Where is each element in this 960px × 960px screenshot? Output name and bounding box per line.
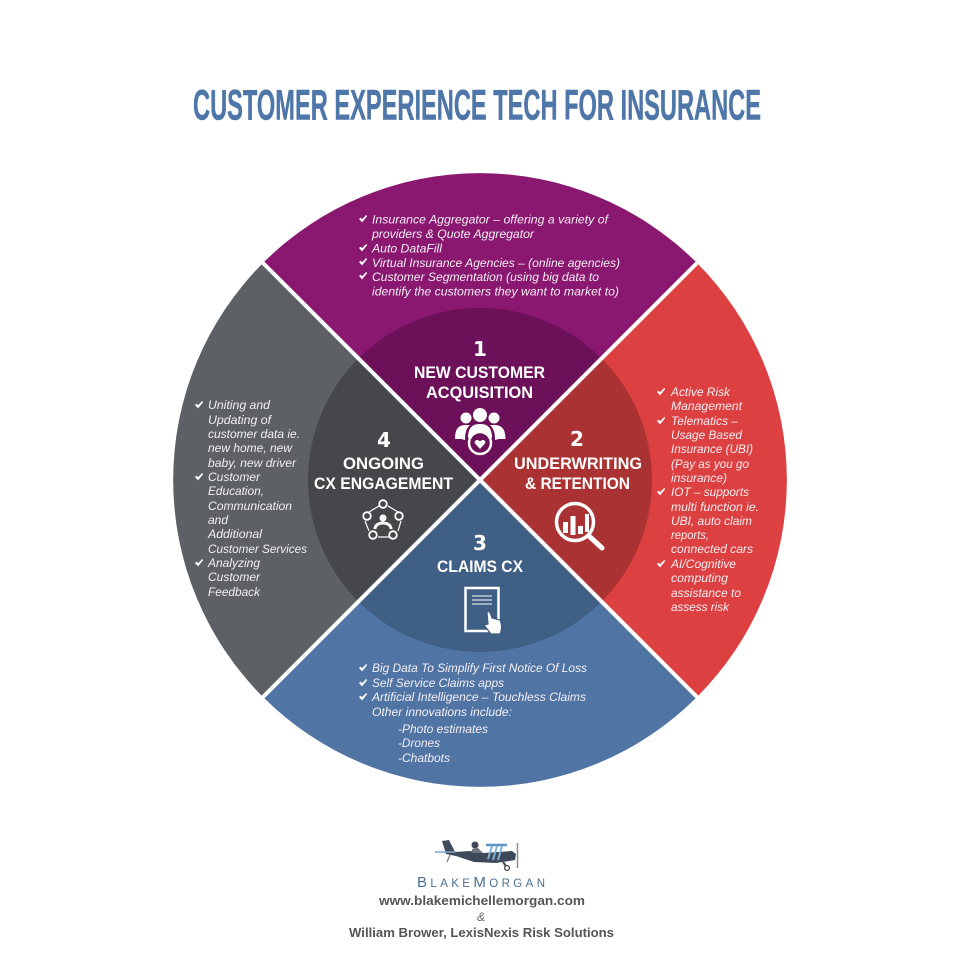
text block: section 2 list: IOT – supports xyxy=(671,487,749,499)
text block: section 1 list: Insurance Aggregator – offering a variety of xyxy=(372,214,610,226)
footer xyxy=(349,840,614,940)
icon: tablet with pointing hand xyxy=(466,588,502,634)
text block: section 2 list: (Pay as you go xyxy=(671,459,750,471)
text block: section 4 list: and xyxy=(208,515,229,527)
heading: section 2: 2 xyxy=(570,427,584,451)
heading: section 2 xyxy=(514,427,642,493)
text block: section 2 list: Telematics – xyxy=(671,416,739,428)
credit: William Brower, LexisNexis Risk Solutions xyxy=(349,925,614,940)
text block: section 4 list: Communication xyxy=(208,501,292,513)
icon: magnifier with bar chart xyxy=(556,504,602,548)
text block: section 3 list: -Drones xyxy=(398,738,440,750)
text block: section 3 list: Other innovations include: xyxy=(372,707,512,719)
text block: section 4 list: new home, new xyxy=(208,443,293,455)
text block: section 1 list: providers & Quote Aggregator xyxy=(371,229,535,241)
text block: section 2 list: Usage Based xyxy=(671,430,743,442)
website: www.blakemichellemorgan.com xyxy=(378,893,585,908)
text block: section 1 list xyxy=(359,214,620,298)
text block: section 2 list: reports, xyxy=(671,530,709,542)
text block: section 2 list: connected cars xyxy=(671,544,753,556)
text block: section 2 list xyxy=(657,387,759,614)
text block: section 4 list: Updating of xyxy=(208,415,273,427)
text block: section 3 list: Self Service Claims apps xyxy=(372,678,504,690)
text block: section 2 list: Insurance (UBI) xyxy=(671,444,753,456)
text block: section 4 list xyxy=(195,400,307,599)
heading: section 4: CX ENGAGEMENT xyxy=(314,474,454,493)
text block: section 2 list: UBI, auto claim xyxy=(671,516,752,528)
text block: section 4 list: baby, new driver xyxy=(208,458,297,470)
text block: section 3 list: Artificial Intelligence – Touchless Claims xyxy=(371,692,586,704)
ampersand: & xyxy=(477,910,485,924)
text block: section 4 list: Customer xyxy=(208,472,261,484)
heading: section 4: 4 xyxy=(377,428,391,452)
panel: ongoing cx engagement xyxy=(173,263,480,697)
text block: section 3 list xyxy=(359,663,587,765)
text block: section 4 list: Education, xyxy=(208,486,264,498)
text block: section 2 list: computing xyxy=(671,573,729,585)
heading: section 3 xyxy=(437,531,524,576)
text block: section 2 list: multi function ie. xyxy=(671,502,759,514)
text block: section 1 list: Auto DataFill xyxy=(371,244,442,256)
heading: section 1: ACQUISITION xyxy=(426,383,533,402)
panel: claims cx xyxy=(263,480,697,787)
text block: section 2 list: AI/Cognitive xyxy=(670,559,736,571)
panel: new customer acquisition xyxy=(263,173,697,480)
heading: section 2: & RETENTION xyxy=(525,474,630,493)
heading: section 1 xyxy=(414,337,545,402)
text block: section 4 list: Additional xyxy=(207,529,262,541)
logo wordmark: B LAKEM ORGAN xyxy=(417,874,545,891)
text block: section 1 list: identify the customers they want to market to) xyxy=(372,286,619,298)
heading: section 4: ONGOING xyxy=(343,454,424,473)
text block: section 2 list: Active Risk xyxy=(670,387,731,399)
text block: section 4 list: Uniting and xyxy=(208,400,271,412)
text block: section 1 list: Customer Segmentation (using big data to xyxy=(372,272,600,284)
text block: section 2 list: Management xyxy=(671,401,743,413)
text block: section 4 list: Analyzing xyxy=(207,558,261,570)
text block: section 3 list: -Chatbots xyxy=(398,753,450,765)
heading: section 2: UNDERWRITING xyxy=(514,454,642,473)
text block: section 2 list: assistance to xyxy=(671,588,742,600)
text block: section 4 list: Customer xyxy=(208,572,261,584)
heading: section 1: 1 xyxy=(473,337,487,361)
heading: section 1: NEW CUSTOMER xyxy=(414,363,545,382)
text block: section 4 list: Customer Services xyxy=(208,544,307,556)
text block: section 4 list: Feedback xyxy=(208,587,261,599)
circular diagram xyxy=(173,173,787,787)
text block: section 3 list: -Photo estimates xyxy=(398,724,488,736)
icon: people network xyxy=(363,500,403,539)
text block: section 2 list: assess risk xyxy=(671,602,730,614)
heading: section 3: 3 xyxy=(473,531,487,555)
panel: underwriting and retention xyxy=(480,263,787,697)
text block: section 3 list: Big Data To Simplify First Notice Of Loss xyxy=(372,663,587,675)
heading: section 4 xyxy=(314,428,454,493)
icon: people with heart xyxy=(455,408,506,454)
text block: section 4 list: customer data ie. xyxy=(208,429,300,441)
icon: biplane logo xyxy=(435,840,518,870)
text block: section 1 list: Virtual Insurance Agencies – (online agencies) xyxy=(372,258,620,270)
heading: section 3: CLAIMS CX xyxy=(437,557,524,576)
text block: section 2 list: insurance) xyxy=(671,473,727,485)
dividers xyxy=(263,263,697,697)
